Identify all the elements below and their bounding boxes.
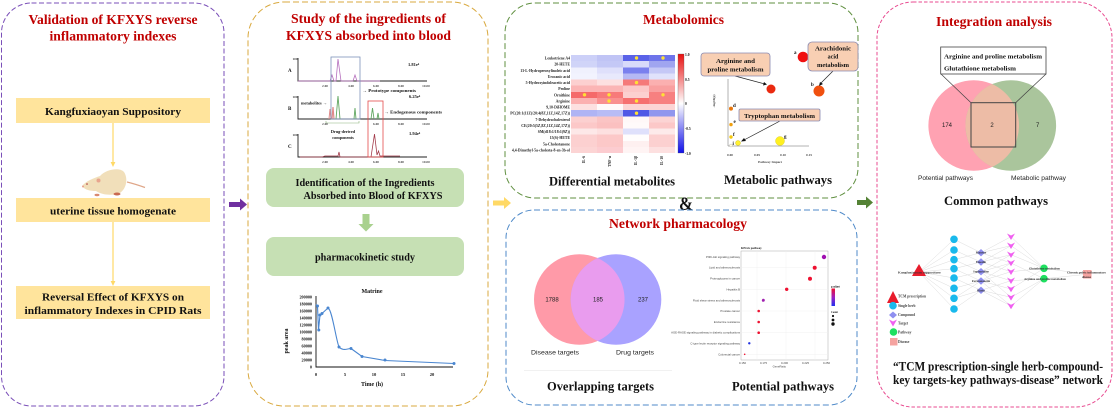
chart: heatmap: Arginine: [556, 99, 570, 103]
chart: chromatograms: Drug-derived: [331, 129, 356, 134]
panel: validation of KFXYS: [2, 3, 224, 406]
box: identification of ingredients: [266, 168, 464, 207]
chart: common pathways venn: Metabolic pathway: [1011, 176, 1066, 182]
box: identification of ingredients: Absorbed into Blood of KFXYS: [304, 191, 443, 202]
callout: arachidonic acid metabolism: [808, 42, 858, 86]
legend: network node types: TCM prescription: [898, 294, 926, 298]
chart: Matrine line chart: 200000: [299, 294, 312, 300]
chart: chromatograms: → Endogenous components: [384, 110, 442, 114]
chart: KEGG dot plot: Fluid shear stress and atherosclerosis: [693, 298, 741, 302]
legend: network node types: Disease: [898, 340, 910, 344]
chart: heatmap: IL-6: [582, 156, 586, 163]
chart: network diagram: [887, 234, 1107, 346]
chart: Matrine line chart: 0: [310, 364, 312, 370]
chart: heatmap: 0: [685, 102, 687, 106]
panel: metabolomics: [505, 3, 858, 198]
chart: chromatograms: components: [332, 135, 354, 140]
legend: network node types: [887, 291, 926, 346]
chart: overlapping targets venn: 237: [638, 298, 649, 304]
chart: chromatograms: A: [288, 69, 292, 74]
box: identification of ingredients: Identification of the Ingredients: [296, 178, 434, 189]
heading: metabolomics: Metabolomics: [643, 12, 724, 27]
chart: Matrine line chart: 20: [430, 372, 435, 377]
callout: arachidonic acid metabolism: Arachidonic: [815, 46, 851, 52]
chart: metabolic pathway bubbles: f: [733, 133, 735, 138]
chart: Matrine line chart: 60000: [302, 344, 312, 348]
chart: network diagram: Glutathione metabolism: [1029, 266, 1060, 270]
chart: heatmap: Urocanic acid: [548, 75, 571, 79]
chart: chromatograms: 6.25e⁴: [409, 94, 421, 99]
chart: overlapping targets venn: 1788: [545, 298, 559, 304]
heading: study of the ingredients: KFXYS absorbed into blood: [286, 28, 451, 43]
chart: overlapping targets venn: Disease targets: [531, 350, 579, 356]
chart: heatmap: 0.5: [685, 78, 690, 82]
chart: Matrine line chart: Time (h): [361, 381, 383, 388]
chart: network diagram: Rhein: [977, 288, 985, 292]
chart: network diagram: disease: [1082, 275, 1092, 279]
heading: validation: [28, 12, 198, 44]
box: Kangfuxiaoyan Suppository: Kangfuxiaoyan Suppository: [45, 107, 182, 118]
chart: Matrine line chart: 0: [315, 372, 318, 377]
heading: potential pathways: Potential pathways: [732, 378, 834, 394]
chart: heatmap: 9,10-DiHOME: [546, 106, 570, 110]
chart: heatmap: -1.0: [685, 152, 691, 156]
chart: common pathways venn: [918, 47, 1066, 182]
chart: heatmap: CE(20:5(5Z,8Z,11Z,14Z,17Z)): [521, 124, 571, 128]
chart: Matrine line chart: [284, 289, 456, 388]
heading: differential metabolites: Differential metabolites: [549, 174, 675, 188]
chart: chromatograms: 4.00: [348, 160, 354, 164]
chart: Matrine line chart: 20000: [302, 358, 312, 362]
panel: network pharmacology: [506, 210, 857, 405]
chart: chromatograms: B: [288, 107, 292, 112]
chart: KEGG dot plot: 0.200: [781, 361, 788, 365]
chart: common pathways venn: 7: [1036, 123, 1040, 129]
chart: chromatograms: 100: [292, 95, 298, 99]
chart: Matrine line chart: 180000: [299, 302, 312, 306]
chart: KEGG dot plot: p.adjust: [831, 286, 840, 288]
chart: KEGG dot plot: GeneRatio: [773, 364, 786, 368]
chart: KEGG dot plot: 0.225: [802, 361, 809, 365]
heading: validation: inflammatory indexes: [50, 28, 176, 44]
chart: KEGG dot plot: Hepatitis B: [726, 287, 740, 291]
arrow: green flow arrow: [857, 196, 873, 208]
legend: network node types: Pathway: [898, 330, 912, 334]
chart: KEGG dot plot: Lipid and atherosclerosis: [709, 266, 741, 270]
chart: metabolic pathway bubbles: 0.05: [754, 153, 760, 157]
callout: arginine and proline metabolism: proline metabolism: [708, 68, 764, 74]
chart: Matrine line chart: 80000: [302, 336, 312, 342]
chart: KEGG dot plot: Endocrine resistance: [714, 320, 740, 324]
box: reversal effect: inflammatory Indexes in CPID Rats: [24, 306, 202, 317]
chart: chromatograms: 1.94e⁴: [409, 131, 421, 136]
chart: heatmap: IL-10: [660, 156, 664, 165]
chart: overlapping targets venn: [531, 254, 661, 356]
chart: heatmap: 5-Hydroxyindoleacetic acid: [526, 81, 571, 85]
callout: arginine and proline metabolism: Arginine and: [716, 59, 756, 65]
heading: metabolic pathways: Metabolic pathways: [724, 172, 832, 187]
chart: KEGG dot plot: [671, 246, 840, 368]
chart: heatmap: [510, 53, 691, 167]
chart: heatmap: PC(20:1(11Z)/20:4(8Z,11Z,14Z,17Z)): [510, 112, 571, 116]
panel: ingredients absorbed into blood: [248, 2, 488, 406]
heading: network pharmacology: Network pharmacology: [609, 216, 747, 231]
chart: common pathways venn: Potential pathways: [918, 176, 973, 182]
chart: Matrine line chart: 120000: [299, 322, 312, 328]
callout: arachidonic acid metabolism: metabolism: [817, 63, 849, 69]
chart: chromatograms: 6.00: [373, 122, 379, 126]
chart: chromatograms: 10.00: [422, 84, 430, 88]
chart: network diagram: Kangfuxiaoyan suppository: [898, 270, 942, 274]
chart: Matrine line chart: 160000: [299, 308, 312, 314]
icon: rat: [82, 169, 145, 196]
chart: chromatograms: C: [288, 145, 292, 150]
chart: chromatograms: 1.81e⁴: [408, 62, 420, 67]
heading: study of the ingredients: [286, 11, 451, 43]
chart: KEGG dot plot: Count: [831, 311, 838, 314]
chart: metabolic pathway bubbles: -log10(p): [712, 94, 716, 108]
chart: KEGG dot plot: Proteoglycans in cancer: [710, 277, 740, 281]
chart: chromatograms: 6.00: [373, 84, 379, 88]
heading: study of the ingredients: Study of the ingredients of: [291, 11, 447, 26]
chart: chromatograms: [288, 57, 442, 164]
chart: common pathways venn: 174: [942, 123, 953, 129]
chart: chromatograms: 8.00: [398, 122, 404, 126]
legend: network node types: Single herb: [898, 304, 915, 308]
chart: network diagram: Formononetin: [972, 279, 990, 283]
chart: chromatograms: 2.00: [322, 160, 328, 164]
arrow: suppository to rat: [111, 123, 115, 167]
text: ampersand: &: [679, 194, 693, 215]
chart: Matrine line chart: 40000: [302, 350, 312, 356]
chart: heatmap: 1.0: [685, 53, 690, 57]
chart: metabolic pathway bubbles: g: [784, 135, 787, 140]
chart: KEGG dot plot: 0.175: [760, 361, 767, 365]
chart: metabolic pathway bubbles: [701, 42, 858, 164]
callout: tryptophan metabolism: Tryptophan metabolism: [744, 113, 816, 120]
panel: integration analysis: [877, 2, 1112, 407]
chart: chromatograms: 10.00: [422, 122, 430, 126]
legend: network node types: Compound: [898, 313, 915, 317]
chart: Matrine line chart: 100000: [299, 330, 312, 334]
heading: integration analysis: Integration analysis: [936, 14, 1052, 29]
box: reversal effect: [16, 286, 210, 319]
chart: common pathways venn: 2: [990, 123, 994, 129]
callout: arachidonic acid metabolism: acid: [828, 54, 839, 60]
chart: heatmap: 15(S)-HETE: [550, 136, 570, 140]
arrow: yellow flow arrow: [493, 197, 511, 209]
chart: chromatograms: 2.00: [322, 122, 328, 126]
chart: heatmap: SM(d18:1/18:1(9Z)): [538, 130, 571, 134]
chart: Matrine line chart: 15: [401, 372, 406, 377]
chart: KEGG dot plot: Colorectal cancer: [718, 352, 740, 356]
chart: heatmap: Proline: [558, 87, 570, 91]
chart: overlapping targets venn: Drug targets: [616, 350, 654, 356]
chart: KEGG dot plot: AGE-RAGE signaling pathway in diabetic complications: [671, 331, 741, 335]
chart: metabolic pathway bubbles: 0.10: [780, 153, 786, 157]
chart: heatmap: Ornithine: [554, 93, 570, 97]
chart: heatmap: Leukotriene A4: [545, 56, 570, 60]
chart: network diagram: Emodin: [976, 260, 986, 264]
box: Kangfuxiaoyan Suppository: [16, 98, 210, 123]
chart: KEGG dot plot: C-type lectin receptor signaling pathway: [690, 341, 741, 345]
chart: chromatograms: → Prototype components: [362, 88, 416, 93]
callout: tryptophan metabolism: [739, 109, 820, 142]
chart: Matrine line chart: 140000: [299, 316, 312, 320]
box: uterine tissue homogenate: uterine tissue homogenate: [50, 206, 176, 218]
callout: arginine and proline metabolism: [701, 53, 770, 86]
chart: KEGG dot plot: KEGG pathway: [741, 246, 762, 250]
chart: metabolic pathway bubbles: d: [733, 104, 736, 109]
chart: heatmap: -0.5: [685, 127, 691, 131]
chart: chromatograms: 10.00: [422, 160, 430, 164]
heading: overlapping targets: Overlapping targets: [547, 378, 654, 394]
box: reversal effect: Reversal Effect of KFXYS on: [42, 292, 184, 304]
callout: shared pathways: Arginine and proline metabolism: [944, 54, 1043, 60]
chart: network diagram: Matrine: [976, 251, 987, 255]
chart: Matrine line chart: 10: [372, 372, 377, 377]
callout: shared pathways: Glutathione metabolism: [944, 66, 1017, 72]
chart: metabolic pathway bubbles: Pathway Impact: [758, 160, 783, 164]
chart: heatmap: 4,4-Dimethyl-5a-cholesta-8-en-3b-ol: [512, 148, 570, 152]
chart: heatmap: TNF-α: [608, 155, 612, 167]
chart: chromatograms: 100: [292, 133, 298, 137]
callout: shared pathways: [941, 47, 1046, 74]
chart: heatmap: 7-Dehydrocholesterol: [535, 118, 570, 122]
arrow: purple flow arrow: [229, 198, 247, 210]
chart: heatmap: 13-L-Hydroperoxylinoleic acid: [520, 69, 571, 73]
legend: network node types: Target: [898, 322, 909, 326]
chart: chromatograms: 8.00: [398, 84, 404, 88]
chart: KEGG dot plot: 0.150: [739, 361, 746, 365]
chart: network diagram: Chronic pelvic inflammatory: [1067, 270, 1107, 274]
arrow: green down arrow: [358, 214, 374, 232]
chart: heatmap: 5a-Cholestanone: [543, 142, 570, 146]
chart: Matrine line chart: 5: [344, 372, 347, 377]
chart: network diagram: Arginine and proline metabolism: [1024, 277, 1066, 281]
chart: KEGG dot plot: 0.250: [823, 361, 830, 365]
chart: overlapping targets venn: 185: [593, 298, 604, 304]
heading: common pathways: Common pathways: [944, 193, 1048, 208]
chart: chromatograms: 100: [292, 57, 298, 61]
chart: heatmap: IL-1β: [634, 156, 638, 165]
box: pharmacokinetic study: pharmacokinetic study: [315, 252, 416, 264]
chart: metabolic pathway bubbles: a: [794, 51, 797, 56]
chart: heatmap: 20-HETE: [554, 63, 570, 67]
chart: KEGG dot plot: Prostate cancer: [720, 309, 740, 313]
chart: chromatograms: 4.00: [348, 84, 354, 88]
text: network caption: [893, 358, 1104, 387]
chart: network diagram: Sophoridine: [973, 270, 989, 274]
chart: Matrine line chart: Matrine: [362, 289, 383, 295]
chart: KEGG dot plot: PI3K-Akt signaling pathway: [706, 255, 741, 259]
chart: metabolic pathway bubbles: b: [811, 83, 814, 88]
chart: chromatograms: metabolites →: [301, 100, 327, 106]
chart: Matrine line chart: peak area: [284, 328, 290, 354]
chart: metabolic pathway bubbles: 0.00: [727, 153, 733, 157]
arrow: homogenate to reversal effect: [111, 222, 115, 286]
chart: chromatograms: 8.00: [398, 160, 404, 164]
box: uterine tissue homogenate: [16, 198, 210, 222]
chart: chromatograms: 2.00: [322, 84, 328, 88]
heading: validation: Validation of KFXYS reverse: [28, 12, 198, 27]
chart: metabolic pathway bubbles: i: [732, 142, 734, 147]
chart: chromatograms: 6.00: [373, 160, 379, 164]
chart: metabolic pathway bubbles: 0.15: [806, 153, 812, 157]
chart: metabolic pathway bubbles: e: [734, 120, 736, 125]
box: pharmacokinetic study: [266, 237, 464, 276]
